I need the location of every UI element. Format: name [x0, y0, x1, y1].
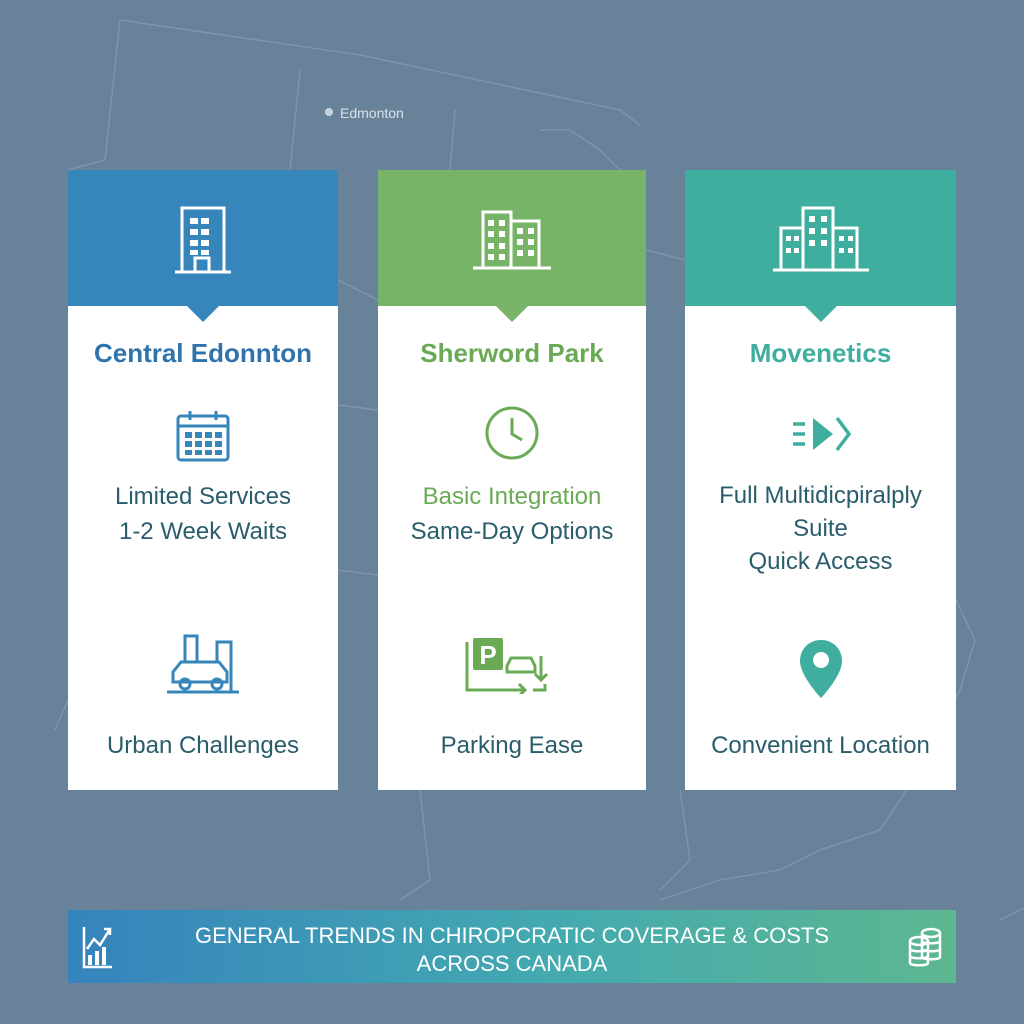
heading: Movenetics	[750, 338, 891, 368]
icon: clock	[486, 406, 538, 460]
heading: Sherword Park	[420, 338, 604, 368]
text: Full Multidicpiralply	[719, 482, 922, 509]
icon: coins	[908, 928, 942, 966]
text: services: Limited Services	[115, 483, 291, 510]
icon: parking: P	[479, 640, 497, 670]
icon: parking	[466, 638, 548, 694]
text: Basic Integration	[423, 483, 601, 510]
icon: urban car	[167, 634, 239, 694]
panel: Sherwood Park	[378, 170, 646, 790]
text: services	[115, 483, 291, 545]
icon: buildings	[473, 210, 551, 270]
banner: general trends	[68, 910, 956, 983]
text: Quick Access	[748, 548, 893, 575]
text: Convenient Location	[711, 732, 930, 759]
map label: Edmonton: Edmonton	[340, 105, 404, 121]
icon: calendar	[176, 411, 230, 462]
icon: location pin	[800, 640, 842, 698]
text: Urban Challenges	[107, 732, 299, 759]
icon: buildings	[773, 206, 869, 272]
text: services: 1-2 Week Waits	[119, 518, 287, 545]
text: Parking Ease	[441, 732, 583, 759]
banner title	[195, 923, 829, 976]
panel: Movenetics	[685, 170, 956, 790]
panel: Central Edmonton	[68, 170, 338, 790]
icon: chart	[82, 927, 112, 968]
icon: building	[175, 206, 231, 274]
banner title: ACROSS CANADA	[417, 951, 607, 976]
text	[719, 482, 922, 575]
text	[411, 483, 613, 545]
text: Suite	[793, 515, 848, 542]
banner title: GENERAL TRENDS IN CHIROPCRATIC COVERAGE & COSTS	[195, 923, 829, 948]
text: Same-Day Options	[411, 518, 613, 545]
icon: fast forward	[793, 417, 851, 451]
heading: Central Edonnton	[94, 338, 312, 368]
